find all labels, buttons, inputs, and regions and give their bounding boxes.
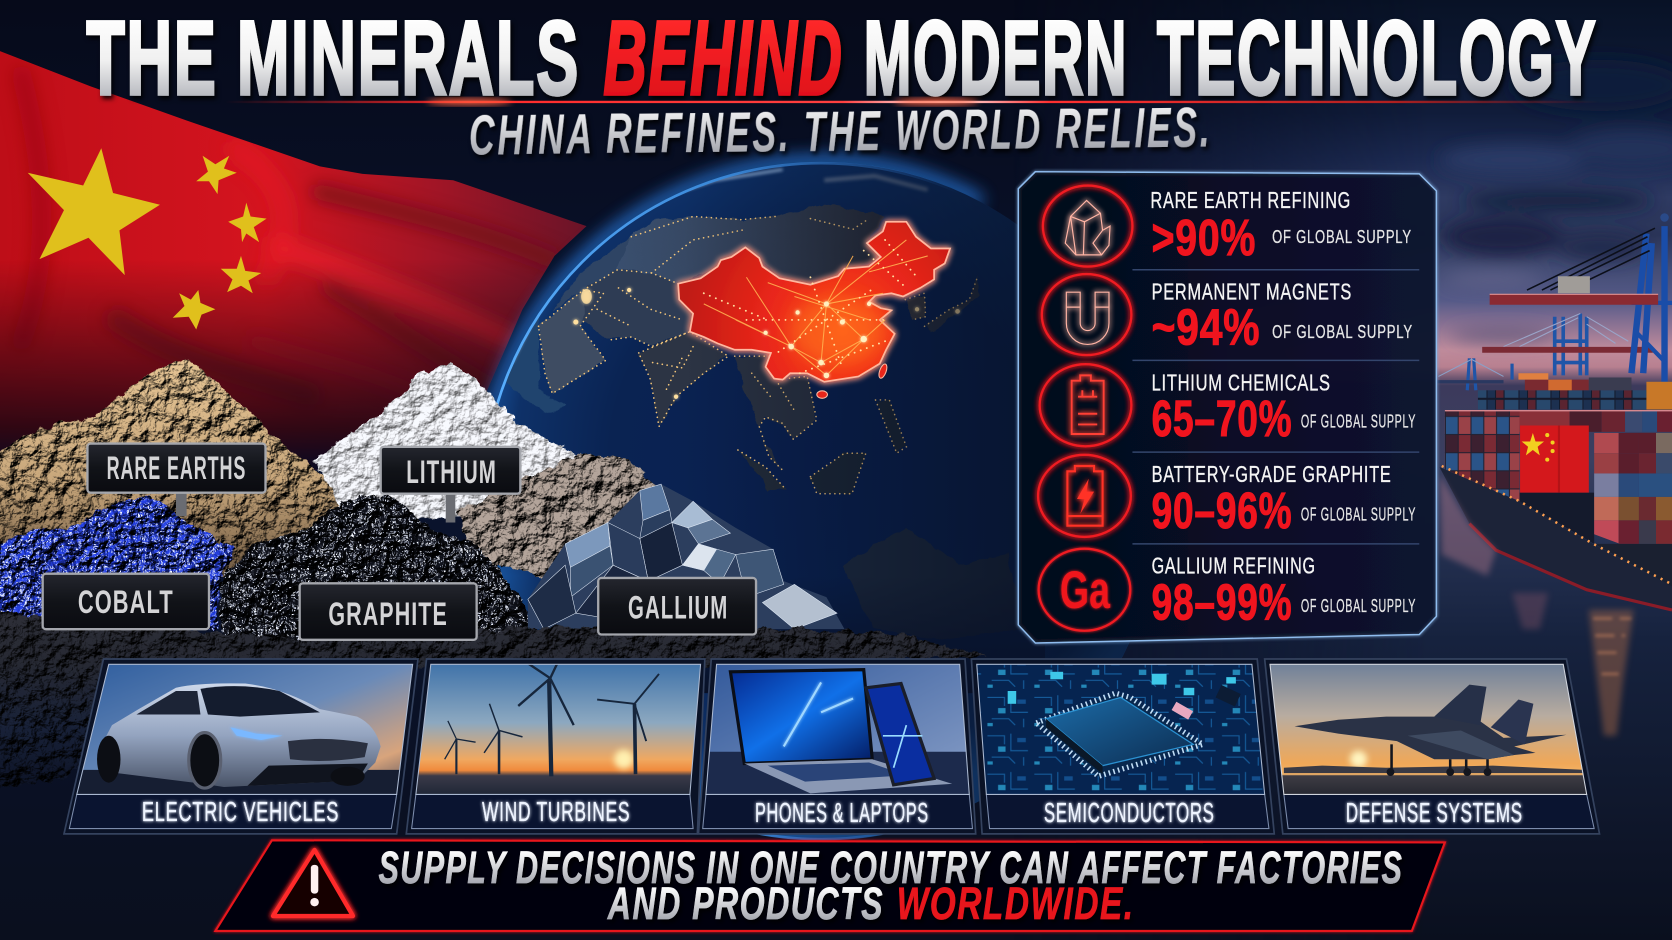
unit: OF GLOBAL SUPPLY (1301, 412, 1416, 432)
sky and water (1082, 0, 1672, 826)
title: BEHIND (604, 0, 843, 117)
sign: graphite: GRAPHITE (328, 596, 448, 632)
row: lithium chemicals (1040, 364, 1416, 447)
sign: cobalt: COBALT (78, 584, 174, 620)
icon: charged battery (1038, 455, 1131, 537)
card: wind turbines (406, 656, 705, 834)
row: rare earth refining (1043, 186, 1412, 267)
sign: rare earths (87, 444, 266, 516)
main crane (1490, 213, 1672, 406)
globe shading (702, 162, 1130, 840)
row: gallium refining (1039, 549, 1416, 631)
caption: WIND TURBINES (482, 796, 630, 827)
atmosphere glow (482, 162, 981, 501)
label: LITHIUM CHEMICALS (1152, 369, 1331, 395)
value: >90% (1152, 209, 1256, 266)
clouds (1440, 60, 1672, 342)
sign: lithium: LITHIUM (406, 454, 497, 490)
value: 98–99% (1152, 574, 1292, 631)
value: 65–70% (1152, 390, 1292, 447)
icon: crystal (1043, 186, 1132, 267)
panel: refining statistics (1018, 172, 1436, 643)
label: GALLIUM REFINING (1152, 553, 1316, 579)
row: permanent magnets (1042, 274, 1413, 355)
icon: Ga symbol (1039, 549, 1130, 631)
unit: OF GLOBAL SUPPLY (1272, 227, 1412, 247)
callout banner (215, 840, 1445, 931)
pile: rare earths (0, 359, 357, 581)
lower fade (469, 576, 1045, 693)
image frame (977, 664, 1265, 794)
image frame (706, 664, 969, 794)
image: turbines (416, 664, 700, 794)
water reflections (1440, 475, 1634, 736)
icon: magnet (1042, 274, 1131, 355)
flag folds (0, 51, 597, 510)
deck light strip (1442, 466, 1672, 584)
title underline (224, 99, 1599, 105)
banner frame (215, 840, 1445, 931)
title: MODERN (864, 0, 1128, 117)
pile: gallium (528, 484, 845, 629)
value: 90–96% (1152, 482, 1292, 539)
image: chip (976, 661, 1269, 798)
label: PERMANENT MAGNETS (1152, 279, 1352, 305)
southeast glow (789, 296, 885, 365)
image: car (78, 664, 412, 794)
image: fighter jet (1269, 661, 1589, 798)
large star (28, 148, 160, 275)
mineral piles (0, 359, 845, 644)
title: THE MINERALS (86, 0, 580, 117)
value: ~94% (1152, 298, 1260, 355)
sign: lithium (381, 447, 520, 523)
unit: OF GLOBAL SUPPLY (1272, 322, 1413, 342)
sign: gallium: GALLIUM (628, 589, 728, 625)
mineral signs (43, 444, 756, 640)
sign: graphite (300, 583, 477, 640)
arctic highlights (512, 170, 928, 363)
flag of China (0, 51, 597, 510)
card: defense systems (1265, 659, 1599, 834)
banner line two: AND PRODUCTS (607, 877, 884, 929)
ship flag (1520, 425, 1589, 493)
rocky ground (0, 610, 986, 789)
sign: rare earths: RARE EARTHS (107, 450, 246, 486)
middle crane (1482, 314, 1653, 375)
caption: SEMICONDUCTORS (1044, 797, 1215, 828)
unit: OF GLOBAL SUPPLY (1301, 504, 1416, 524)
panel frame (1018, 172, 1436, 643)
distant cranes (1437, 358, 1512, 390)
icon: battery (1040, 364, 1131, 446)
islands (817, 363, 888, 398)
row: battery-grade graphite (1038, 455, 1416, 539)
pile: lithium (315, 363, 602, 523)
containers (1445, 410, 1672, 587)
network lines (704, 240, 928, 375)
banner line two: WORLDWIDE. (897, 877, 1135, 929)
pile: brown mineral (459, 453, 661, 597)
rim light (483, 163, 1159, 839)
image frame (416, 664, 701, 794)
image frame (1270, 664, 1587, 794)
caption: DEFENSE SYSTEMS (1346, 797, 1523, 828)
pile: graphite (219, 494, 546, 644)
title (86, 0, 1597, 117)
container ship hull (1440, 467, 1672, 610)
caption: ELECTRIC VEHICLES (142, 796, 339, 827)
sign: cobalt (43, 574, 209, 629)
image frame (77, 664, 413, 794)
subtitle: CHINA REFINES. THE WORLD RELIES. (469, 96, 1212, 167)
card: semiconductors (971, 659, 1274, 834)
upper deck containers (1478, 373, 1672, 409)
card: phones and laptops (698, 659, 976, 834)
globe (469, 149, 1173, 874)
unit: OF GLOBAL SUPPLY (1301, 596, 1416, 616)
harbor scene (1082, 0, 1672, 826)
image: laptop and phone (704, 661, 970, 798)
China highlighted (678, 222, 950, 398)
small stars (196, 156, 237, 194)
panel: applications (64, 656, 1599, 834)
continents (506, 204, 1009, 622)
city lights (538, 216, 978, 494)
label: BATTERY-GRADE GRAPHITE (1152, 461, 1392, 487)
pile: cobalt (0, 493, 237, 629)
label: RARE EARTH REFINING (1151, 187, 1351, 213)
card: electric vehicles (64, 659, 418, 834)
icon: Ga symbol: Ga (1060, 561, 1110, 620)
icon: warning triangle (273, 850, 353, 916)
caption: PHONES & LAPTOPS (755, 797, 929, 828)
sign: gallium (598, 578, 756, 634)
